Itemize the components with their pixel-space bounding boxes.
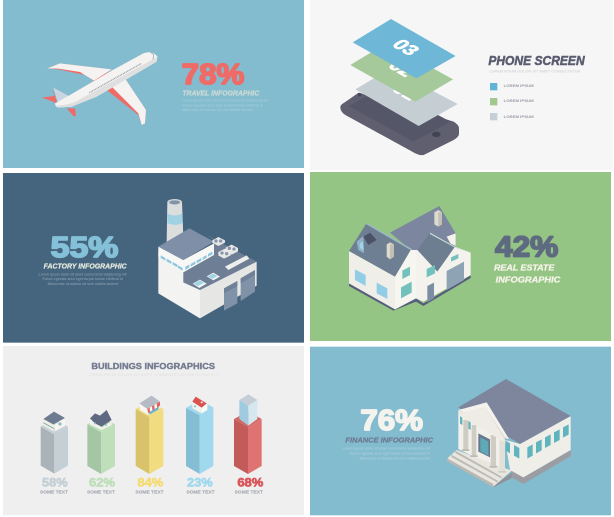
bar labels xyxy=(40,490,263,495)
chimneys xyxy=(387,210,442,259)
right wall xyxy=(505,416,571,477)
phone background xyxy=(310,0,613,170)
subheading: buildings: LOREM IPSUM DOLOR SIT AMET CONSECTETUR ADIPISCING ELIT xyxy=(87,372,221,377)
rooftop fans xyxy=(212,237,238,259)
subheading: phone: LOREM IPSUM DOLOR SIT AMET CONSECTETUR xyxy=(489,68,580,73)
heading: factory: FACTORY INFOGRAPHIC xyxy=(44,262,127,271)
front windows xyxy=(460,415,471,430)
dormer xyxy=(357,233,377,253)
base strip xyxy=(349,275,471,311)
body text: travel xyxy=(182,98,269,112)
bar: 68% xyxy=(234,394,262,474)
stat: 76%: 76% xyxy=(360,405,423,437)
legend: layers: LOREM IPSUM xyxy=(504,114,534,119)
chimney xyxy=(167,199,183,242)
bar values: 23% xyxy=(187,476,213,489)
bar labels: SOME TEXT xyxy=(135,490,164,495)
legend: layers xyxy=(490,83,534,120)
right wing wall xyxy=(416,247,471,302)
icon: bank xyxy=(447,379,571,487)
body text: finance: Lorem ipsum dolor sit amet consectetur adipiscing elit xyxy=(343,447,431,451)
body text: factory: Lorem ipsum dolor sit amet consectetur adipiscing elit xyxy=(39,272,128,276)
bar values xyxy=(42,476,264,489)
bar values: 84% xyxy=(137,476,164,489)
icon: airplane xyxy=(42,52,157,125)
bar labels: SOME TEXT xyxy=(40,490,68,495)
steps xyxy=(447,450,512,487)
side windows xyxy=(506,424,569,459)
body text: finance: Fusce egestas arcu eget turpis luctus eleifend in xyxy=(350,451,430,455)
columns xyxy=(462,420,506,473)
front wall xyxy=(458,410,505,472)
plinth xyxy=(512,450,571,484)
heading: travel: TRAVEL INFOGRAPHIC xyxy=(182,88,260,97)
bar labels: SOME TEXT xyxy=(87,490,115,495)
icon: phone xyxy=(340,87,459,155)
real estate background xyxy=(310,172,611,341)
panel: factory xyxy=(3,173,304,343)
rooftop vent xyxy=(225,255,249,270)
layer: green screen 02 xyxy=(350,43,453,102)
door xyxy=(478,433,490,457)
heading: phone screen: PHONE SCREEN xyxy=(488,54,585,68)
back roof xyxy=(390,206,456,252)
legend: layers: LOREM IPSUM xyxy=(504,83,534,88)
layer: gray screen 01: 01 xyxy=(387,82,424,103)
front gable roof xyxy=(417,233,455,272)
bar labels: SOME TEXT xyxy=(186,490,215,495)
bar labels: SOME TEXT xyxy=(235,490,263,495)
body text: travel: Lorem ipsum dolor sit amet consectetur adipiscing elit xyxy=(182,98,269,102)
factory background xyxy=(3,173,304,343)
panel: travel xyxy=(3,0,304,168)
windows and doors xyxy=(355,269,387,299)
stat: 55%: 55% xyxy=(51,232,118,264)
stat: 42%: 42% xyxy=(495,231,558,263)
travel background xyxy=(3,0,304,168)
buildings background xyxy=(3,346,304,515)
heading: real estate xyxy=(494,264,561,284)
skylights xyxy=(193,273,220,288)
roof xyxy=(458,379,571,444)
bar values: 58% xyxy=(42,476,68,489)
garage doors xyxy=(224,270,255,311)
icon: house xyxy=(349,206,471,311)
body text: factory: Fusce egestas arcu eget turpis luctus eleifend in xyxy=(43,277,123,281)
layer: gray screen 01 xyxy=(355,68,458,126)
panel: finance xyxy=(310,347,611,515)
bar: 84% xyxy=(136,396,163,474)
finance background xyxy=(310,347,611,515)
left block walls xyxy=(349,251,395,309)
heading: real estate: REAL ESTATE xyxy=(494,264,555,273)
stat: 78%: 78% xyxy=(182,59,244,91)
panel: phone screen xyxy=(310,0,613,170)
heading: real estate: INFOGRAPHIC xyxy=(496,275,561,284)
clerestory windows xyxy=(161,252,212,271)
layer: green screen 02: 02 xyxy=(383,58,419,80)
body text: factory xyxy=(39,272,128,286)
heading: buildings: BUILDINGS INFOGRAPHICS xyxy=(91,361,215,371)
pediment xyxy=(458,402,509,439)
icon: factory xyxy=(158,199,257,318)
bar: 58% xyxy=(41,412,68,474)
layer: blue screen 03 xyxy=(353,19,456,78)
bar values: 68% xyxy=(237,476,264,489)
heading: finance: FINANCE INFOGRAPHIC xyxy=(345,436,434,445)
body text: factory: Maecenas ut massa sit sem mattis laoreet xyxy=(48,282,119,286)
bar values: 62% xyxy=(89,476,116,489)
panel: real estate xyxy=(310,172,611,341)
panel: buildings chart xyxy=(3,346,304,515)
body text: finance xyxy=(343,447,431,460)
body text: travel: Fusce egestas arcu eget turpis luctus eleifend in xyxy=(182,103,263,107)
legend: layers: LOREM IPSUM xyxy=(504,98,534,103)
bar: 23% xyxy=(186,397,213,474)
body text: travel: Maecenas ut massa sit sem mattis laoreet xyxy=(182,108,254,112)
body text: finance: Maecenas ut massa sit sem mattis laoreet xyxy=(360,456,431,460)
layer: blue screen 03: 03 xyxy=(387,37,424,59)
bar: 62% xyxy=(87,410,115,474)
